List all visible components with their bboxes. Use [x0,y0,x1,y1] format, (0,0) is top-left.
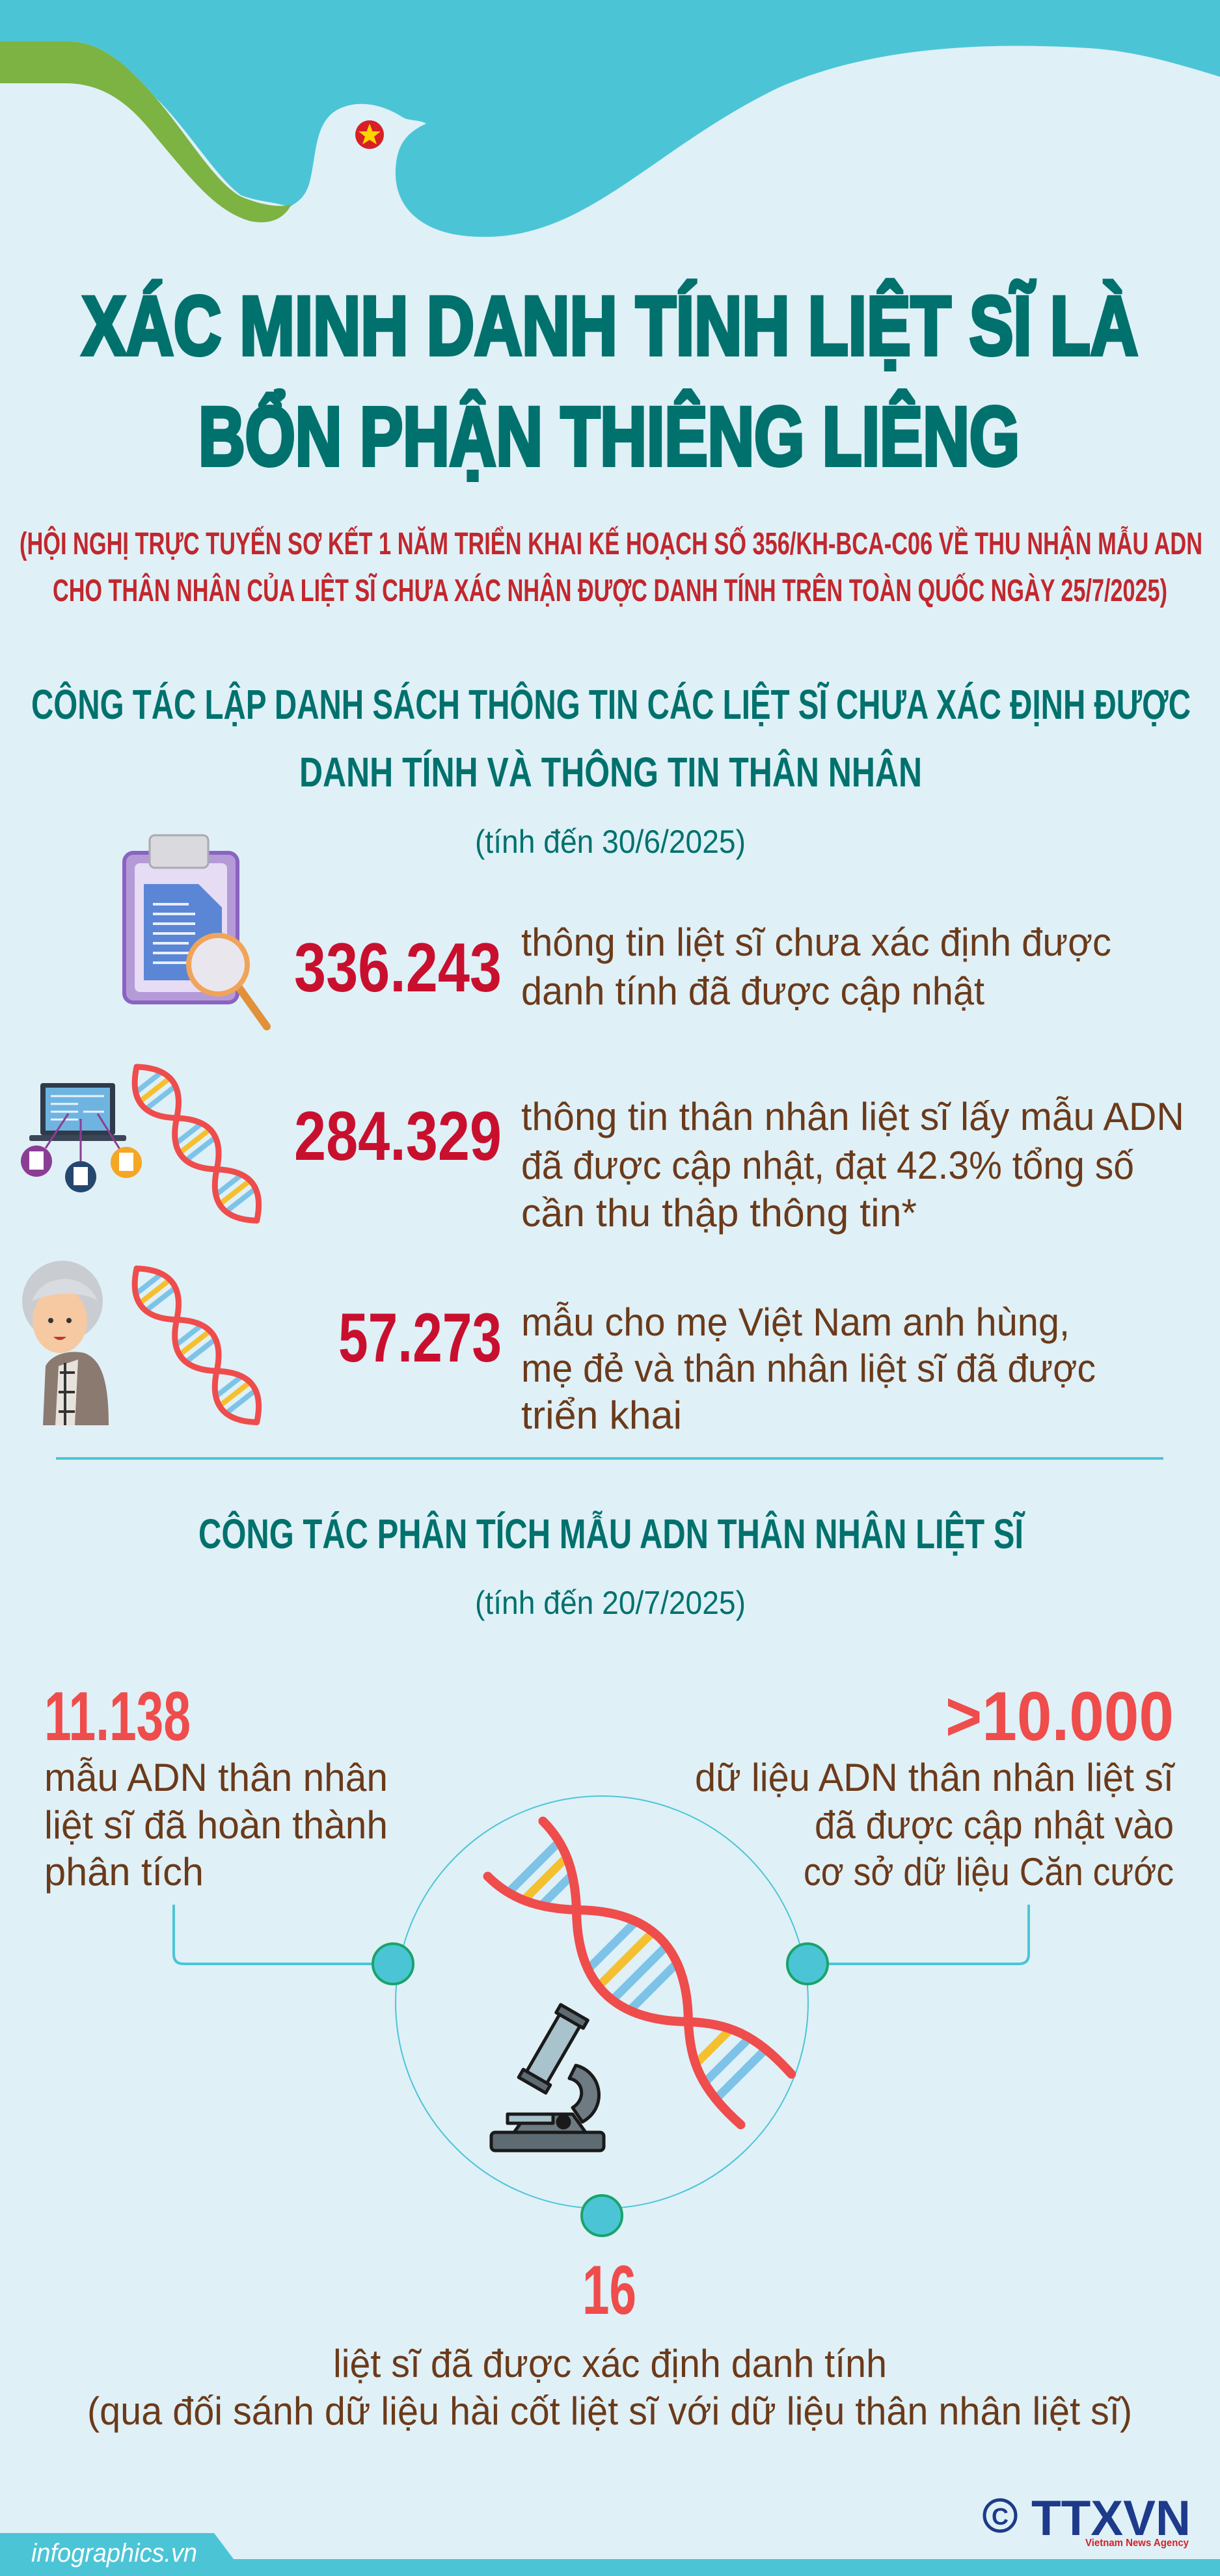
stat 11.138: liệt sĩ đã hoàn thành [44,1803,388,1847]
big dna [488,1821,794,2127]
icon: star emblem [355,120,384,149]
stat >10.000: dữ liệu ADN thân nhân liệt sĩ [695,1756,1175,1799]
stat 57.273: 57.273 [338,1298,502,1376]
stat 284.329: cần thu thập thông tin* [521,1191,917,1235]
stat 11.138: 11.138 [44,1677,191,1755]
stat >10.000: đã được cập nhật vào [815,1803,1174,1847]
stat 336.243: danh tính đã được cập nhật [521,969,984,1013]
icon: microscope [491,2005,604,2151]
footer [0,2533,1220,2576]
stat 57.273: mẫu cho mẹ Việt Nam anh hùng, [521,1300,1070,1344]
stat >10.000: cơ sở dữ liệu Căn cước [804,1850,1174,1894]
icon: laptop network [21,1083,142,1192]
subtitle [20,526,1202,608]
connector right [807,1905,1029,1964]
stat 11.138: phân tích [44,1850,204,1894]
stat 16 [87,2251,1132,2433]
icon: clipboard with magnifier [124,835,267,1026]
node right [787,1944,828,1984]
stat 284.329: 284.329 [294,1097,502,1175]
stat 16: 16 [582,2251,636,2329]
stat 336.243 [294,920,1111,1013]
logo: TTXVN: Vietnam News Agency [1085,2538,1189,2549]
icon: grandmother [22,1261,109,1425]
stat 57.273: mẹ đẻ và thân nhân liệt sĩ đã được [521,1347,1096,1390]
diagram: analysis circle [174,1796,1029,2236]
date note 1: (tính đến 30/6/2025) [475,824,746,860]
stat 284.329: đã được cập nhật, đạt 42.3% tổng số [521,1144,1134,1187]
green ribbon [0,42,291,222]
node left [373,1944,413,1984]
logo: TTXVN: C [992,2503,1009,2530]
stat 57.273: triển khai [521,1393,682,1437]
stat 57.273 [338,1298,1096,1437]
connector left [174,1905,393,1964]
stat 284.329: thông tin thân nhân liệt sĩ lấy mẫu ADN [521,1095,1184,1138]
stat >10.000 [695,1677,1175,1894]
date note 2: (tính đến 20/7/2025) [475,1585,746,1621]
logo: TTXVN: TTXVN [1031,2491,1191,2546]
icon: dna small 1 [121,1055,272,1233]
stat 16: liệt sĩ đã được xác định danh tính [333,2342,887,2385]
stat 16: (qua đối sánh dữ liệu hài cốt liệt sĩ với dữ liệu thân nhân liệt sĩ) [87,2389,1132,2433]
title [82,280,1138,483]
header wave with dove [0,0,1220,237]
stat 336.243: thông tin liệt sĩ chưa xác định được [521,920,1111,964]
stat >10.000: >10.000 [945,1677,1174,1755]
stat 11.138 [44,1677,388,1894]
stat 11.138: mẫu ADN thân nhân [44,1756,388,1799]
node bottom [582,2195,622,2236]
stat 284.329 [294,1095,1184,1235]
icon: dna small 2 [121,1257,272,1434]
stat 336.243: 336.243 [294,928,502,1006]
section heading 1: DANH TÍNH VÀ THÔNG TIN THÂN NHÂN [299,748,922,796]
footer source text: infographics.vn [31,2539,197,2568]
section heading 1 [31,680,1191,796]
